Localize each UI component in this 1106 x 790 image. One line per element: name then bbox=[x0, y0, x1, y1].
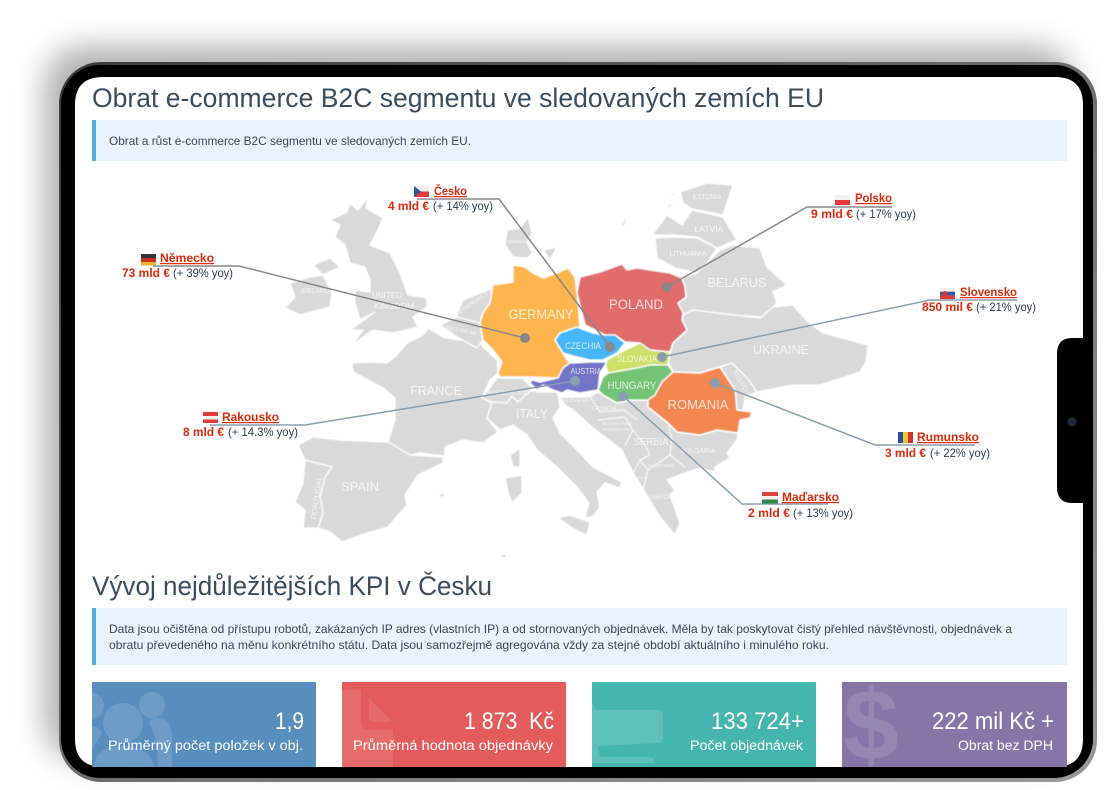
label: Polsko: 9 mld € bbox=[811, 207, 853, 221]
title: KPI: Vývoj nejdůležitějších KPI v Česku bbox=[92, 570, 492, 601]
label: Česko: Česko bbox=[434, 183, 467, 198]
flag: Slovakia bbox=[940, 288, 955, 299]
country names: SWITZERLAND bbox=[486, 391, 530, 397]
label: Maďarsko: Maďarsko bbox=[782, 490, 839, 504]
label: Slovensko: 850 mil € bbox=[922, 300, 973, 314]
flag: Germany bbox=[141, 254, 156, 266]
KPI card: revenue bbox=[842, 682, 1067, 767]
country names: HERZEGOVINA bbox=[602, 427, 632, 432]
country names: CZECHIA bbox=[565, 341, 601, 351]
country names: FRANCE bbox=[410, 383, 462, 398]
country names: SERBIA bbox=[634, 437, 669, 448]
KPI card: number of orders: Počet objednávek bbox=[690, 738, 803, 753]
label: Rakousko: Rakousko bbox=[222, 410, 279, 424]
label: Rakousko: (+ 14.3% yoy) bbox=[228, 425, 298, 439]
note box: KPI: obratu převedeného na měnu konkrétního státu. Data jsou samozřejmě agregována vždy za stejné období aktuálního i minulého roku. bbox=[109, 638, 829, 652]
country names: SLOVAKIA bbox=[617, 354, 657, 364]
label: Německo: 73 mld € bbox=[122, 266, 170, 280]
country names: DENMARK bbox=[508, 239, 528, 244]
country names: KINGDOM bbox=[374, 302, 414, 311]
Austria bbox=[530, 362, 607, 393]
country names: GREECE bbox=[650, 495, 670, 501]
country names: NETHERLANDS bbox=[455, 291, 490, 318]
Czechia bbox=[555, 327, 625, 360]
label: Polsko: (+ 17% yoy) bbox=[856, 207, 916, 221]
KPI card: items per order: Průměrný počet položek v obj. bbox=[108, 738, 303, 753]
country names: MACEDONIA bbox=[648, 463, 674, 468]
Romania bbox=[648, 367, 752, 435]
country names: HUNGARY bbox=[608, 380, 657, 392]
label: Maďarsko bbox=[748, 490, 853, 520]
note box: KPI: Data jsou očištěna od přístupu robotů, zakázaných IP adres (vlastních IP) a od stornovaných objednávek. Měla by tak poskytovat čistý přehled návštěvnosti, objednávek a bbox=[109, 622, 1012, 636]
country names: ITALY bbox=[516, 407, 549, 421]
leader line: Rumunsko bbox=[710, 378, 975, 445]
KPI card: average order value: Průměrná hodnota objednávky bbox=[353, 738, 553, 753]
highlighted countries bbox=[480, 264, 752, 435]
leader line: Maďarsko bbox=[618, 391, 828, 504]
country names: UKRAINE bbox=[753, 342, 809, 357]
note box: turnover: Obrat a růst e-commerce B2C segmentu ve sledovaných zemích EU. bbox=[109, 134, 471, 148]
icon: document bbox=[342, 690, 393, 767]
flag: Czechia bbox=[414, 186, 429, 197]
grey countries bbox=[285, 183, 868, 558]
flag: Romania bbox=[898, 432, 913, 443]
country names: BOSNIA AND bbox=[602, 421, 633, 426]
country names: ALBANIA bbox=[634, 475, 648, 480]
KPI card: revenue: Obrat bez DPH bbox=[958, 738, 1053, 753]
Hungary bbox=[598, 365, 673, 403]
country names: ROMANIA bbox=[668, 397, 729, 412]
KPI card: number of orders: 133 724+ bbox=[711, 708, 804, 735]
label: Česko: (+ 14% yoy) bbox=[433, 199, 493, 213]
country names: ESTONIA bbox=[692, 192, 722, 201]
label: Rumunsko: Rumunsko bbox=[917, 430, 979, 444]
label: Rumunsko bbox=[885, 430, 990, 460]
label: Německo: (+ 39% yoy) bbox=[173, 266, 233, 280]
country names: POLAND bbox=[609, 297, 663, 312]
country names: CROATIA bbox=[592, 406, 617, 412]
country names: GERMANY bbox=[508, 307, 574, 322]
label: Polsko: Polsko bbox=[855, 191, 892, 205]
label: Slovensko: (+ 21% yoy) bbox=[976, 300, 1036, 314]
label: Rumunsko: (+ 22% yoy) bbox=[930, 446, 990, 460]
Germany bbox=[480, 265, 580, 378]
country names: MOLDOVA bbox=[732, 370, 752, 399]
label: Rumunsko: 3 mld € bbox=[885, 446, 926, 460]
label: Slovensko bbox=[922, 285, 1036, 314]
flag: Hungary bbox=[762, 492, 778, 504]
country names bbox=[300, 192, 809, 520]
country names: BULGARIA bbox=[680, 448, 716, 455]
Slovakia bbox=[605, 343, 670, 373]
label: Německo: Německo bbox=[160, 251, 214, 265]
leader line: Slovensko bbox=[657, 300, 1017, 362]
country names: BELARUS bbox=[708, 275, 767, 290]
KPI card: number of orders bbox=[592, 682, 816, 767]
label: Česko bbox=[388, 183, 493, 213]
country names: UNITED bbox=[372, 291, 402, 300]
flag: Austria bbox=[203, 412, 218, 423]
country names: BELGIUM bbox=[446, 325, 477, 337]
note box: KPI bbox=[92, 608, 1067, 665]
country names: LATVIA bbox=[694, 225, 724, 234]
map of Europe bbox=[285, 183, 868, 558]
label: Polsko bbox=[811, 191, 916, 221]
camera lens bbox=[1068, 418, 1076, 426]
Balkan borders bbox=[590, 397, 685, 490]
label: Maďarsko: (+ 13% yoy) bbox=[793, 506, 853, 520]
country names: LITHUANIA bbox=[670, 249, 706, 258]
leader line: Polsko bbox=[662, 207, 892, 292]
label: Rakousko: 8 mld € bbox=[183, 425, 224, 439]
screen bbox=[75, 77, 1083, 767]
leader line: Rakousko bbox=[210, 376, 580, 425]
label: Německo bbox=[122, 251, 233, 280]
KPI card: revenue: 222 mil Kč + bbox=[932, 708, 1054, 735]
label: Rakousko bbox=[183, 410, 298, 439]
label: Maďarsko: 2 mld € bbox=[748, 506, 790, 520]
title: turnover: Obrat e-commerce B2C segmentu ve sledovaných zemích EU bbox=[92, 83, 824, 113]
Poland bbox=[577, 264, 687, 352]
country names: PORTUGAL bbox=[309, 475, 324, 520]
note box: turnover bbox=[92, 120, 1067, 161]
country names: SLOVENIA bbox=[563, 398, 589, 404]
KPI card: items per order: 1,9 bbox=[275, 708, 304, 735]
KPI card: average order value: 1 873 Kč bbox=[464, 708, 554, 735]
icon: cart bbox=[592, 703, 663, 763]
country names: SPAIN bbox=[341, 480, 379, 494]
KPI card: items per order bbox=[76, 682, 316, 767]
country names: IRELAND bbox=[300, 286, 330, 295]
country names: AUSTRIA bbox=[570, 367, 602, 376]
KPI card: average order value bbox=[342, 682, 566, 767]
leader line: Německo bbox=[153, 266, 530, 343]
label: Slovensko: Slovensko bbox=[960, 285, 1017, 299]
camera notch bbox=[1057, 338, 1084, 503]
icon: dollar: $ bbox=[843, 669, 899, 781]
icon: people bbox=[92, 692, 172, 767]
leader line: Česko bbox=[417, 199, 615, 352]
flag: Poland bbox=[835, 195, 850, 205]
label: Česko: 4 mld € bbox=[388, 199, 429, 213]
